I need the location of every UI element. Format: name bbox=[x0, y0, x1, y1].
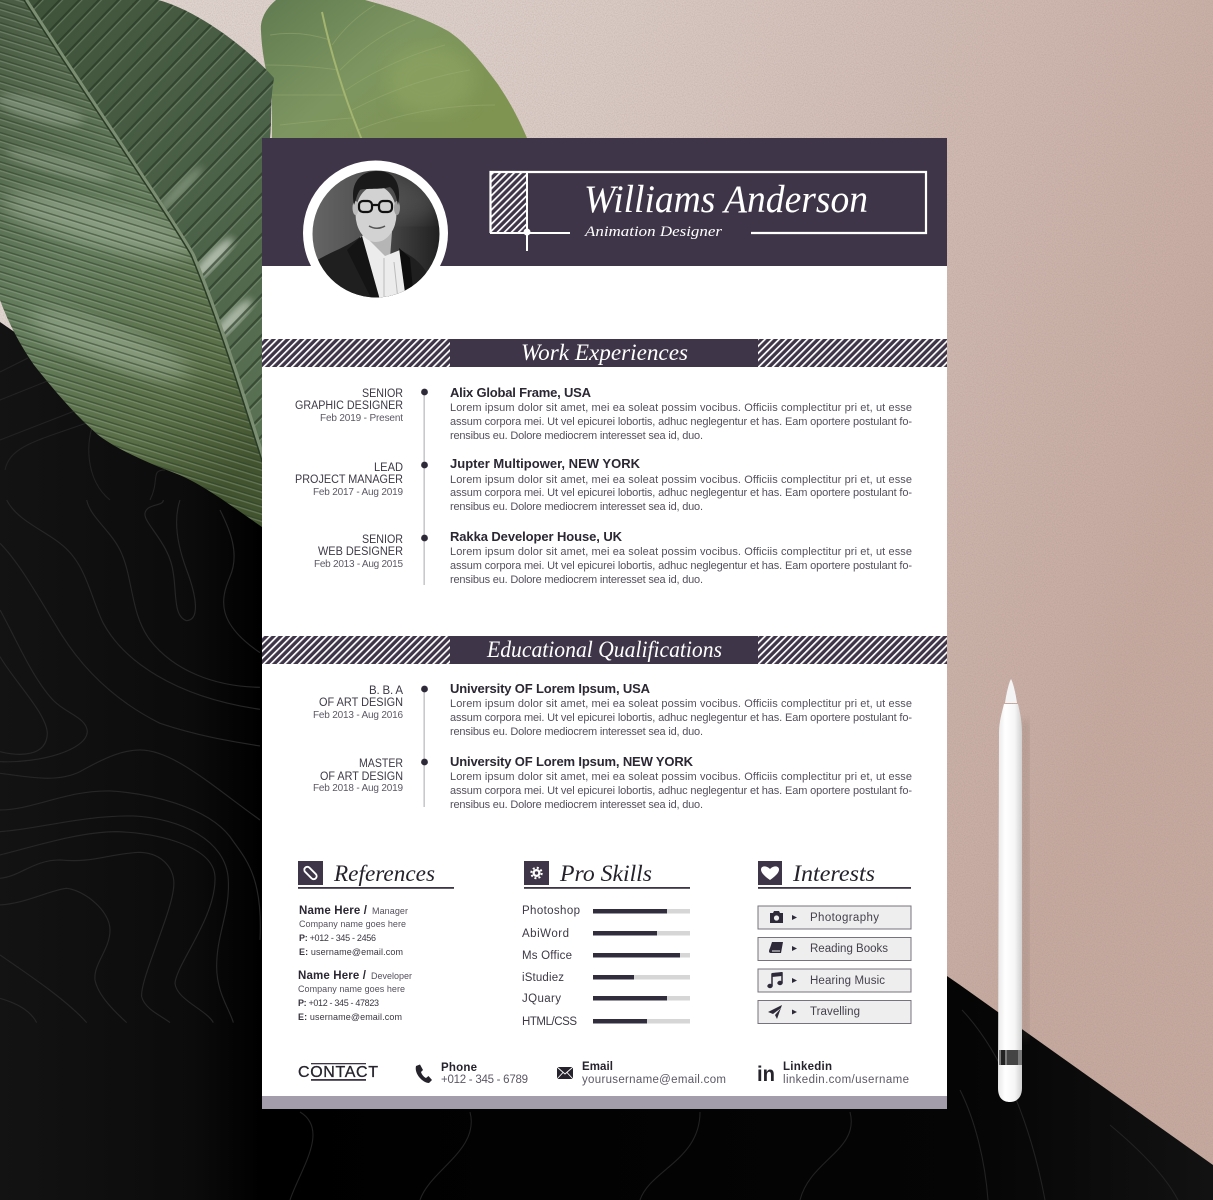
education 2 details: assum corpora mei. Ut vel epicurei lobortis, adhuc neglegentur et has. Eam oportere postulant fo- bbox=[450, 785, 912, 797]
job 1 role: GRAPHIC DESIGNER bbox=[295, 400, 403, 412]
skill bars: AbiWord bbox=[522, 928, 569, 940]
education 1 details bbox=[450, 681, 912, 738]
job 3 role: SENIOR bbox=[362, 534, 403, 546]
reference 1 bbox=[299, 905, 408, 957]
timeline: work bbox=[421, 389, 428, 585]
section band: educational qualifications bbox=[262, 636, 947, 664]
interest: photography bbox=[758, 906, 911, 929]
education 1 degree: Feb 2013 - Aug 2016 bbox=[313, 710, 403, 721]
education 1 degree bbox=[313, 685, 403, 721]
education 2 degree bbox=[313, 758, 403, 794]
job 2 details: Jupter Multipower, NEW YORK bbox=[450, 456, 641, 471]
job 2 role: Feb 2017 - Aug 2019 bbox=[313, 487, 403, 498]
leaf: large dark green leaf bbox=[0, 0, 280, 540]
header band bbox=[262, 138, 947, 266]
reference 1: Manager bbox=[372, 906, 408, 916]
profile photo bbox=[303, 160, 448, 306]
contact: email: yourusername@email.com bbox=[582, 1074, 726, 1086]
pro skills heading: Pro Skills bbox=[559, 861, 652, 886]
reference 1: E: username@email.com bbox=[299, 947, 403, 957]
section band: work experiences bbox=[262, 339, 947, 367]
job 2 role: LEAD bbox=[374, 462, 403, 474]
job 1 role bbox=[295, 388, 403, 424]
interest: travelling: Travelling bbox=[810, 1006, 860, 1018]
references heading: References bbox=[333, 861, 435, 886]
contact: linkedin bbox=[757, 1061, 909, 1086]
job 3 details: assum corpora mei. Ut vel epicurei lobortis, adhuc neglegentur et has. Eam oportere postulant fo- bbox=[450, 560, 912, 572]
timeline: education bbox=[421, 686, 428, 807]
contact: phone: +012 - 345 - 6789 bbox=[441, 1074, 528, 1086]
job 3 details bbox=[450, 529, 912, 586]
education 1 degree: B. B. A bbox=[369, 685, 403, 697]
contact: linkedin: in bbox=[757, 1063, 775, 1086]
contact: linkedin: Linkedin bbox=[783, 1061, 832, 1073]
education 1 details: assum corpora mei. Ut vel epicurei lobortis, adhuc neglegentur et has. Eam oportere postulant fo- bbox=[450, 712, 912, 724]
education 1 details: University OF Lorem Ipsum, USA bbox=[450, 681, 651, 696]
reference 2: E: username@email.com bbox=[298, 1012, 402, 1022]
education 2 degree: Feb 2018 - Aug 2019 bbox=[313, 783, 403, 794]
reference 2: Name Here / bbox=[298, 970, 367, 982]
section band: work experiences: Work Experiences bbox=[521, 340, 688, 365]
interests heading bbox=[758, 861, 911, 889]
education 1 details: rensibus eu. Dolore mediocrem interesset sea id, duo. bbox=[450, 726, 703, 738]
interest: reading books bbox=[758, 938, 911, 960]
education 2 details: Lorem ipsum dolor sit amet, mei ea soleat possim vocibus. Officiis complectitur pri et, ut esse bbox=[450, 771, 912, 783]
contact: email bbox=[557, 1061, 726, 1086]
reference 2: Developer bbox=[371, 971, 412, 981]
job 1 details: Lorem ipsum dolor sit amet, mei ea soleat possim vocibus. Officiis complectitur pri et, ut esse bbox=[450, 402, 912, 414]
job 1 details: assum corpora mei. Ut vel epicurei lobortis, adhuc neglegentur et has. Eam oportere postulant fo- bbox=[450, 416, 912, 428]
interest: hearing music: Hearing Music bbox=[810, 975, 885, 987]
interest: hearing music bbox=[758, 969, 911, 992]
skill bars: iStudiez bbox=[522, 972, 564, 984]
reference 2 bbox=[298, 970, 412, 1022]
contact label: CONTACT bbox=[298, 1064, 378, 1081]
education 1 degree: OF ART DESIGN bbox=[319, 697, 403, 709]
reference 2: P: +012 - 345 - 47823 bbox=[298, 998, 379, 1008]
job 2 role bbox=[295, 462, 403, 498]
skill bars: Photoshop bbox=[522, 905, 580, 917]
contact: linkedin: linkedin.com/username bbox=[783, 1074, 909, 1086]
pro skills heading bbox=[524, 861, 690, 889]
interest: reading books: Reading Books bbox=[810, 943, 888, 955]
contact: phone: Phone bbox=[441, 1062, 477, 1074]
job 1 details bbox=[450, 385, 912, 442]
education 2 details bbox=[450, 754, 912, 811]
job 1 role: SENIOR bbox=[362, 388, 403, 400]
education 1 details: Lorem ipsum dolor sit amet, mei ea soleat possim vocibus. Officiis complectitur pri et, ut esse bbox=[450, 698, 912, 710]
job 3 details: Rakka Developer House, UK bbox=[450, 529, 623, 544]
footer bar bbox=[262, 1096, 947, 1109]
reference 1: Name Here / bbox=[299, 905, 368, 917]
job 3 role: WEB DESIGNER bbox=[318, 546, 403, 558]
interest: travelling bbox=[758, 1000, 911, 1024]
leaf: olive green leaf behind the page bbox=[255, 0, 535, 140]
page: resume sheet bbox=[262, 138, 947, 1109]
reference 1: Company name goes here bbox=[299, 919, 406, 929]
job 2 details: assum corpora mei. Ut vel epicurei lobortis, adhuc neglegentur et has. Eam oportere postulant fo- bbox=[450, 487, 912, 499]
contact: email: Email bbox=[582, 1061, 613, 1073]
interest: photography: Photography bbox=[810, 912, 879, 924]
section band: educational qualifications: Educational Qualifications bbox=[486, 637, 722, 662]
education 2 details: University OF Lorem Ipsum, NEW YORK bbox=[450, 754, 694, 769]
job 2 details: rensibus eu. Dolore mediocrem interesset sea id, duo. bbox=[450, 501, 703, 513]
job 1 details: Alix Global Frame, USA bbox=[450, 385, 592, 400]
contact: phone bbox=[416, 1062, 528, 1086]
education 2 degree: OF ART DESIGN bbox=[320, 771, 403, 783]
job 1 role: Feb 2019 - Present bbox=[320, 413, 403, 424]
name: Williams Anderson bbox=[584, 178, 868, 221]
job 3 details: rensibus eu. Dolore mediocrem interesset sea id, duo. bbox=[450, 574, 703, 586]
skill bars: JQuary bbox=[522, 993, 561, 1005]
job 3 details: Lorem ipsum dolor sit amet, mei ea soleat possim vocibus. Officiis complectitur pri et, ut esse bbox=[450, 546, 912, 558]
job 3 role: Feb 2013 - Aug 2015 bbox=[314, 559, 403, 570]
name frame with hatch block bbox=[490, 172, 926, 251]
job 2 role: PROJECT MANAGER bbox=[295, 474, 403, 486]
background: black diagonal panel with contour lines bbox=[0, 322, 1213, 1200]
skill bars bbox=[522, 905, 690, 1028]
job 3 role bbox=[314, 534, 403, 570]
job title: Animation Designer bbox=[584, 224, 722, 240]
job 1 details: rensibus eu. Dolore mediocrem interesset sea id, duo. bbox=[450, 430, 703, 442]
reference 1: P: +012 - 345 - 2456 bbox=[299, 933, 376, 943]
education 2 details: rensibus eu. Dolore mediocrem interesset sea id, duo. bbox=[450, 799, 703, 811]
references heading bbox=[298, 861, 454, 889]
skill bars: Ms Office bbox=[522, 950, 572, 962]
pencil bbox=[998, 679, 1029, 1102]
reference 2: Company name goes here bbox=[298, 984, 405, 994]
education 2 degree: MASTER bbox=[359, 758, 403, 770]
job 2 details bbox=[450, 456, 912, 513]
interests heading: Interests bbox=[792, 861, 875, 886]
skill bars: HTML/CSS bbox=[522, 1016, 577, 1028]
job 2 details: Lorem ipsum dolor sit amet, mei ea soleat possim vocibus. Officiis complectitur pri et, ut esse bbox=[450, 474, 912, 486]
